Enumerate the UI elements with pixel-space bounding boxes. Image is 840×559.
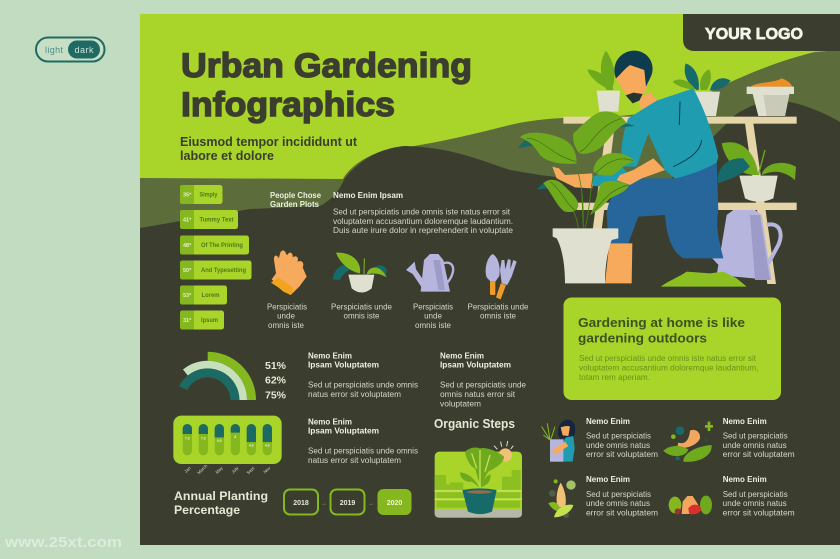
text block: column two top: Ipsam Voluptatem	[440, 360, 511, 370]
text block: column one top: natus error sit voluptatem	[308, 390, 401, 399]
intro text block: Duis aute irure dolor in reprehenderit in voluptate	[333, 226, 514, 235]
tag: And Typesetting: And Typesetting	[201, 268, 246, 274]
feature text: flower: Nemo Enim	[723, 417, 767, 426]
leaf tips	[518, 121, 635, 189]
icon: vegetables	[669, 496, 712, 514]
bar chart: July	[230, 465, 240, 474]
icon: corn	[548, 479, 576, 518]
year steps	[284, 489, 412, 515]
text block: column two top: Nemo Enim	[440, 352, 484, 360]
year steps: 2019	[340, 500, 355, 507]
plant on lower shelf	[718, 142, 796, 202]
callout panel: Sed ut perspiciatis unde omnis iste natus error sit	[579, 354, 757, 363]
tag: Simply	[180, 185, 222, 204]
heading: organic steps: Organic Steps	[434, 416, 515, 431]
intro text block: Sed ut perspiciatis unde omnis iste natus error sit	[333, 208, 511, 216]
hair	[614, 51, 653, 87]
tag: Simply: Simply	[200, 192, 218, 198]
tag: Of The Printing: 48*	[183, 243, 192, 249]
year steps: →	[368, 501, 374, 507]
feature text: vegetables	[723, 475, 795, 518]
tool captions: Perspiciatis	[413, 302, 453, 312]
feature text: woman: Sed ut perspiciatis	[586, 432, 651, 440]
icon: trowel and fork	[486, 254, 517, 299]
bar chart: 4.3	[249, 444, 254, 448]
tool captions: omnis iste	[480, 312, 517, 320]
shirt	[621, 88, 718, 179]
feature text: woman: Nemo Enim	[586, 417, 630, 426]
heading: annual planting percentage	[174, 489, 268, 517]
pot with soil	[747, 78, 794, 116]
subtitle: Eiusmod tempor incididunt ut	[180, 135, 358, 149]
tag: Ipsum: Ipsum	[201, 318, 218, 324]
tag: Tummy Text	[180, 210, 238, 229]
icon: watering can	[406, 254, 453, 292]
callout panel: Gardening at home is like	[578, 315, 745, 330]
tag: Simply: 35*	[183, 192, 192, 198]
callout panel: voluptatem accusantium doloremque laudantium,	[579, 364, 758, 372]
gardener	[592, 51, 723, 283]
neck and face	[638, 92, 658, 109]
text block: column one top: Nemo Enim	[308, 352, 352, 360]
hand right	[617, 158, 665, 185]
leaves	[520, 133, 577, 164]
tool captions: omnis iste	[415, 321, 452, 330]
big pot	[553, 228, 618, 283]
feature text: corn: Sed ut perspiciatis	[586, 490, 651, 499]
grass patch	[661, 272, 747, 287]
logo tab: YOUR LOGO	[705, 26, 803, 43]
tool captions: Perspiciatis unde	[468, 302, 529, 312]
tag: Tummy Text: 41*	[183, 218, 192, 224]
poster background	[140, 14, 840, 545]
feature text: woman	[586, 417, 658, 459]
text block: column one bottom: natus error sit voluptatem	[308, 456, 401, 465]
intro text block: Nemo Enim Ipsam	[333, 191, 403, 200]
bar chart	[173, 416, 282, 475]
title: Infographics	[181, 86, 395, 124]
gauge chart	[183, 356, 252, 400]
tool captions	[267, 302, 529, 330]
feature text: vegetables: error sit voluptatem	[723, 508, 795, 518]
title	[181, 47, 472, 124]
tag: Ipsum: 31*	[183, 318, 192, 324]
gauge percentages: 51%	[265, 360, 287, 372]
logo tab	[683, 14, 840, 51]
text block: column one top: Ipsam Voluptatem	[308, 360, 379, 370]
pants	[607, 160, 723, 258]
feature text: flower	[723, 417, 795, 459]
tags list	[180, 185, 252, 330]
text block: column two top: omnis natus error sit	[440, 390, 516, 399]
feature text: flower: error sit voluptatem	[723, 450, 795, 459]
title: Urban Gardening	[181, 47, 472, 85]
people chose label: People Chose	[270, 191, 322, 200]
feature text: vegetables: Sed ut perspiciatis	[723, 490, 788, 499]
bar chart: 8	[234, 435, 236, 439]
large plant foliage	[518, 111, 635, 228]
tool captions: Perspiciatis	[267, 302, 307, 312]
text block: column two top: Sed ut perspiciatis unde	[440, 380, 527, 390]
year steps: 2020	[387, 500, 402, 507]
tag: And Typesetting: 50*	[183, 268, 192, 274]
icon: flower and leaves	[663, 422, 713, 462]
heading: annual planting percentage: Percentage	[174, 503, 240, 517]
heading: annual planting percentage: Annual Planting	[174, 489, 268, 503]
dark ground	[140, 100, 840, 545]
text block: column one bottom: Sed ut perspiciatis unde omnis	[308, 447, 418, 456]
text block: column two top: voluptatem	[440, 400, 481, 408]
icon: gloves	[271, 250, 307, 295]
bar chart: Sept	[246, 465, 256, 475]
toggle: light dark: dark	[74, 45, 94, 55]
leaf veins	[527, 118, 633, 213]
feature text: woman: unde omnis natus	[586, 441, 650, 450]
feature text: flower: unde omnis natus	[723, 441, 787, 450]
tool captions: unde	[424, 312, 442, 320]
text block: column one bottom: Nemo Enim	[308, 418, 352, 427]
gauge percentages: 62%	[265, 374, 287, 386]
feature text: corn: Nemo Enim	[586, 475, 630, 484]
feature text: woman: error sit voluptatem	[586, 450, 658, 459]
feature text: vegetables: Nemo Enim	[723, 475, 767, 484]
bar chart: 5.5	[217, 439, 222, 443]
tag: Lorem: Lorem	[202, 293, 220, 299]
bar chart: May	[214, 465, 224, 475]
feature text: corn: unde omnis natus	[586, 499, 650, 508]
text block: column one top	[308, 352, 418, 399]
intro text block: voluptatem accusantium doloremque laudantium.	[333, 217, 513, 226]
mid green hills	[140, 50, 840, 300]
boot	[605, 243, 632, 283]
bar chart: Nov	[262, 465, 272, 474]
subtitle	[180, 135, 358, 163]
text block: column one top: Sed ut perspiciatis unde omnis	[308, 380, 418, 390]
callout panel	[564, 298, 781, 400]
tag: Lorem	[180, 286, 227, 304]
illustration: gardener with shelf and plants	[553, 51, 797, 287]
tool captions: omnis iste	[344, 312, 380, 320]
text block: column one bottom: Ipsam Voluptatem	[308, 427, 379, 436]
stems	[570, 173, 593, 228]
plant middle top	[673, 63, 731, 116]
tag: Lorem: 53*	[183, 293, 192, 299]
tag: Tummy Text: Tummy Text	[200, 218, 234, 224]
tag: Ipsum	[180, 310, 224, 330]
toggle: light dark: light	[45, 45, 63, 55]
tool captions: Perspiciatis unde	[331, 302, 393, 312]
tag: Of The Printing: Of The Printing	[201, 243, 243, 249]
feature text: corn	[586, 475, 658, 518]
bar chart: March	[196, 463, 209, 475]
illustration: organic steps plant scene	[435, 441, 522, 518]
tool captions: unde	[277, 312, 295, 320]
tag: And Typesetting	[180, 260, 252, 280]
bar chart: 7.3	[185, 437, 190, 441]
hand left	[552, 167, 592, 188]
people chose label	[270, 191, 322, 209]
icon: woman with plant	[542, 420, 575, 462]
year steps: →	[321, 501, 327, 507]
beard	[626, 93, 643, 103]
bar chart: 7.3	[201, 437, 206, 441]
toggle: light dark	[36, 38, 104, 62]
feature text: corn: error sit voluptatem	[586, 508, 658, 518]
gauge percentages: 75%	[265, 390, 287, 402]
tool captions: omnis iste	[268, 321, 305, 330]
plant left top	[587, 51, 620, 112]
tag: Of The Printing	[180, 236, 249, 254]
icon: potted plant	[333, 253, 387, 292]
people chose label: Garden Plots	[270, 200, 320, 209]
subtitle: labore et dolore	[180, 149, 274, 163]
text block: column two top	[440, 352, 527, 408]
bar chart: Jan	[183, 465, 192, 474]
watermark: www.25xt.com	[4, 535, 122, 551]
callout panel: gardening outdoors	[578, 330, 707, 346]
callout panel: totam rem aperiam.	[579, 373, 650, 382]
feature text: vegetables: unde omnis natus	[723, 499, 787, 508]
feature text: flower: Sed ut perspiciatis	[723, 432, 788, 440]
text block: column one bottom	[308, 418, 418, 465]
shelf	[563, 117, 797, 284]
gauge percentages	[265, 360, 287, 402]
watering can	[687, 210, 781, 280]
year steps: 2018	[293, 500, 309, 507]
bar chart: 4.3	[265, 444, 270, 448]
intro text block	[333, 191, 514, 235]
